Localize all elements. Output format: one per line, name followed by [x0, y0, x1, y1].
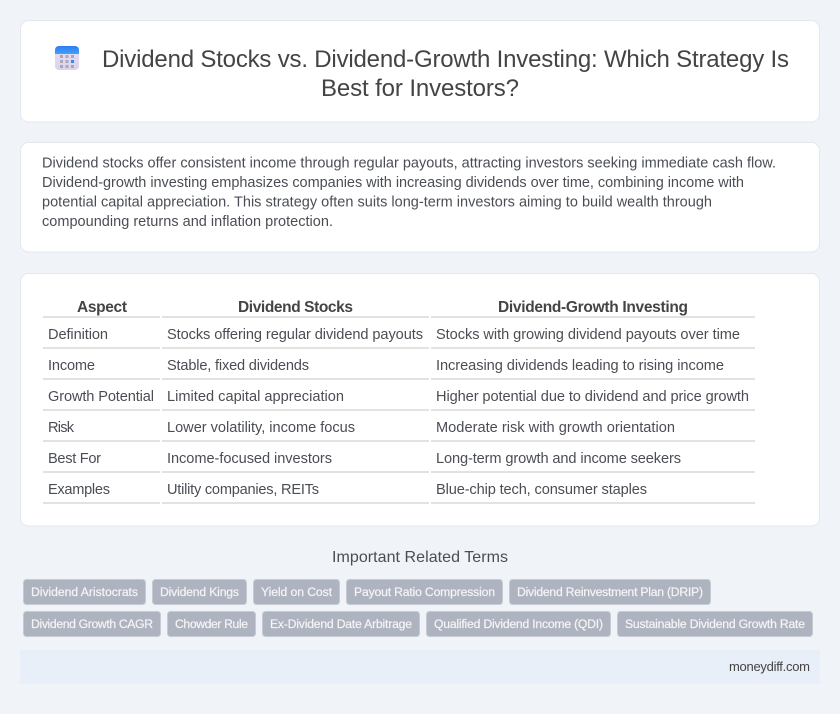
title: Dividend Stocks vs. Dividend-Growth Investing: Which Strategy Is: [102, 46, 789, 73]
tag: dividend kings: Dividend Kings: [160, 585, 239, 599]
row: income: Stable, fixed dividends: [167, 358, 309, 374]
table header row: [77, 299, 688, 316]
row: best for: Long-term growth and income seekers: [436, 451, 681, 467]
row: growth potential: Higher potential due to dividend and price growth: [436, 389, 749, 405]
footer bar: [20, 650, 820, 684]
row: examples: Utility companies, REITs: [167, 482, 319, 498]
row: risk: Lower volatility, income focus: [167, 420, 355, 436]
panel: comparison table: [20, 274, 820, 526]
tag: chowder rule: [168, 612, 256, 636]
tag: payout ratio compression: Payout Ratio Compression: [354, 585, 495, 599]
heading: important related terms: Important Related Terms: [332, 549, 508, 566]
tag: qualified dividend income: Qualified Dividend Income (QDI): [434, 617, 603, 631]
footer source text: moneydiff.com: [729, 659, 810, 674]
table header row: Dividend-Growth Investing: [498, 299, 688, 316]
row: examples: Examples: [48, 482, 110, 498]
row: definition: Stocks with growing dividend payouts over time: [436, 327, 740, 343]
panel: title card: [20, 20, 820, 122]
tag: chowder rule: Chowder Rule: [175, 617, 248, 631]
intro paragraph: [42, 156, 776, 230]
row: definition: Stocks offering regular dividend payouts: [167, 327, 423, 343]
row: risk: [48, 420, 675, 436]
tag: qualified dividend income: [426, 612, 610, 636]
tag: dividend aristocrats: Dividend Aristocrats: [31, 585, 138, 599]
tag: yield on cost: Yield on Cost: [261, 585, 333, 599]
row: examples: Blue-chip tech, consumer staples: [436, 482, 647, 498]
row: best for: Best For: [48, 451, 101, 467]
tag: dividend aristocrats: [24, 580, 146, 604]
row: growth potential: Growth Potential: [48, 389, 154, 405]
intro paragraph: compounding returns and inflation protection.: [42, 214, 333, 230]
row: income: Income: [48, 358, 95, 374]
row: income: Increasing dividends leading to rising income: [436, 358, 724, 374]
tag: sustainable dividend growth rate: Sustainable Dividend Growth Rate: [625, 617, 805, 631]
intro paragraph: Dividend-growth investing emphasizes companies with increasing dividends over time, combining income with: [42, 175, 744, 191]
tag: ex-dividend date arbitrage: Ex-Dividend Date Arbitrage: [270, 617, 412, 631]
tag: dividend reinvestment plan: [510, 580, 710, 604]
title: [102, 46, 789, 102]
row: risk: Risk: [48, 420, 75, 436]
tag list: related terms: [24, 580, 812, 636]
tag: payout ratio compression: [346, 580, 502, 604]
row: growth potential: Limited capital appreciation: [167, 389, 344, 405]
table header row: Aspect: [77, 299, 127, 316]
row: definition: [48, 327, 740, 343]
tag: dividend growth cagr: Dividend Growth CAGR: [31, 617, 153, 631]
tag: sustainable dividend growth rate: [618, 612, 812, 636]
row: best for: [48, 451, 681, 467]
tag: dividend growth cagr: [24, 612, 160, 636]
intro paragraph: potential capital appreciation. This strategy often suits long-term investors aiming to build wealth through: [42, 194, 712, 210]
tag: ex-dividend date arbitrage: [262, 612, 420, 636]
row: growth potential: [48, 389, 749, 405]
row: examples: [48, 482, 647, 498]
tag: yield on cost: [254, 580, 340, 604]
row: risk: Moderate risk with growth orientation: [436, 420, 675, 436]
tag: dividend kings: [152, 580, 246, 604]
row: definition: Definition: [48, 327, 108, 343]
table header row: Dividend Stocks: [238, 299, 353, 316]
panel: introduction text: [20, 142, 820, 252]
title: Best for Investors?: [321, 75, 519, 102]
row: best for: Income-focused investors: [167, 451, 332, 467]
tag: dividend reinvestment plan: Dividend Reinvestment Plan (DRIP): [517, 585, 703, 599]
row: income: [48, 358, 724, 374]
intro paragraph: Dividend stocks offer consistent income through regular payouts, attracting investors seeking immediate cash flow.: [42, 156, 776, 172]
icon: calendar: [55, 46, 79, 70]
